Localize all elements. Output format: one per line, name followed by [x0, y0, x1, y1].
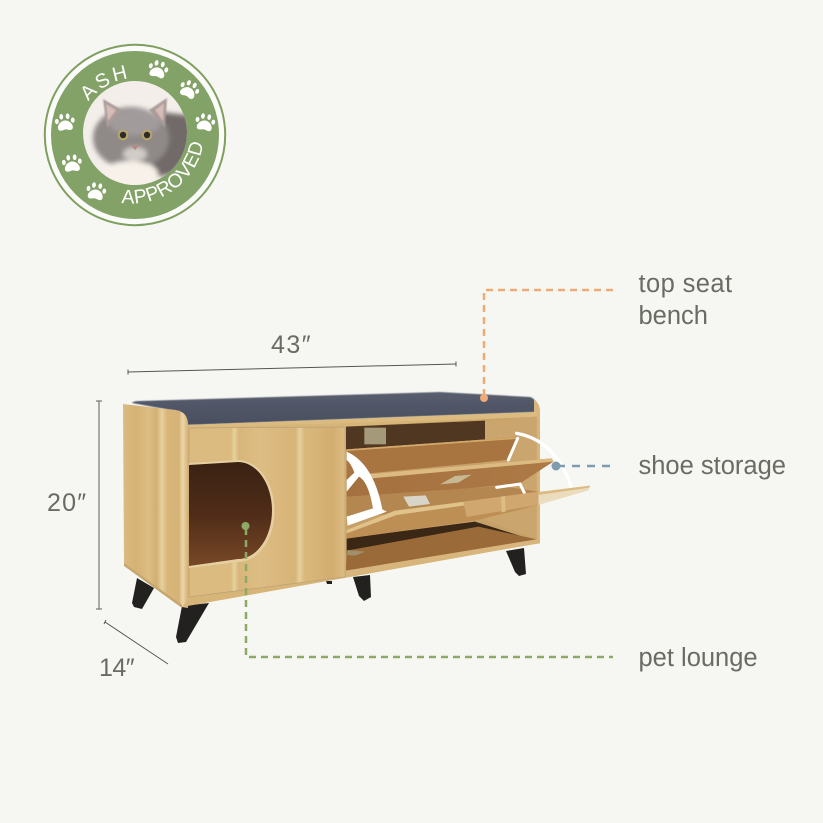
dimension: height label: 20″ [47, 489, 87, 517]
shoe compartment [346, 417, 590, 575]
dimension: depth label: 14″ [99, 654, 135, 682]
front frame [182, 412, 540, 607]
upper tilted board [347, 437, 517, 477]
dimension: depth line [104, 620, 168, 664]
bench furniture [123, 392, 590, 643]
white hinge: left [347, 452, 387, 526]
badge paws [54, 58, 216, 201]
bottom dark cavity [347, 522, 525, 555]
legs [132, 548, 526, 643]
leader: top seat bench [480, 290, 613, 402]
label tag [364, 428, 386, 444]
badge text: APPROVED: APPROVED [121, 142, 202, 204]
label: top seat bench: bench [638, 302, 708, 330]
label: pet lounge: pet lounge [638, 644, 758, 672]
dimension: width line [128, 362, 456, 374]
badge text: ASH: ASH [82, 65, 126, 102]
white hinge: right [497, 433, 571, 493]
cat hole [189, 460, 274, 568]
left side panel [123, 404, 188, 608]
label: top seat bench: top seat [638, 270, 732, 298]
badge: Ash approved [44, 44, 226, 226]
dimension: width label: 43″ [271, 331, 312, 359]
bottom shelf [346, 527, 537, 571]
flap end [538, 486, 590, 505]
leader: shoe storage [552, 462, 615, 470]
badge cat photo [83, 81, 187, 185]
front flap [347, 493, 538, 539]
label: shoe storage: shoe storage [638, 452, 786, 480]
opening interior [346, 417, 537, 571]
middle flap [347, 458, 553, 497]
dimension: height line [96, 401, 102, 609]
cushion [132, 392, 537, 425]
door panel [189, 427, 345, 597]
lower inner board [347, 486, 538, 517]
flap handle [463, 492, 538, 517]
leader: pet lounge [242, 522, 613, 657]
